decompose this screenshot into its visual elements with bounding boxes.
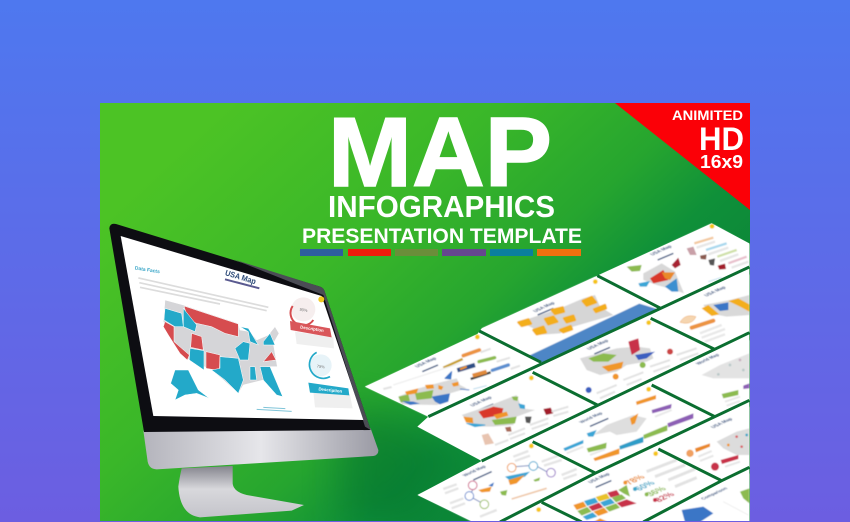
slide: USA pins map: USA Map	[710, 417, 735, 429]
heading: USA Map: USA Map	[224, 268, 257, 286]
subtitle: INFOGRAPHICS: INFOGRAPHICS	[328, 189, 555, 224]
monitor	[109, 224, 380, 520]
badge: ANIMITED: ANIMITED	[672, 107, 743, 123]
percent list: 36%	[643, 485, 669, 498]
slide: world dots map	[653, 340, 749, 412]
slide backing	[365, 223, 749, 522]
heading: Data Facts: Data Facts	[134, 265, 160, 275]
gauge: red 90%: 90%	[299, 307, 308, 313]
slide: USA pins map	[686, 406, 750, 472]
footer url	[257, 407, 292, 411]
body text lines	[138, 278, 268, 311]
USA map tiles	[573, 485, 637, 522]
gauge: blue 75%: 75%	[317, 363, 326, 369]
Alaska	[171, 370, 209, 400]
panel: green cover	[100, 97, 750, 522]
slide: USA chart map: USA Map	[703, 286, 728, 298]
slide: world network	[418, 443, 593, 522]
slide: USA percent map	[535, 320, 712, 404]
slide: USA chart map	[679, 274, 750, 342]
slide: world network: World Map	[461, 465, 488, 478]
slide: USA transport map: USA Map	[414, 357, 439, 369]
percent list	[622, 474, 675, 503]
slide: USA regional map	[418, 375, 568, 456]
USA map	[163, 300, 283, 400]
percent list: 78%	[622, 473, 648, 486]
slide: world tags: World Map	[578, 411, 605, 424]
colour bars	[300, 249, 581, 256]
slide collage	[340, 223, 749, 522]
slide: bottom centre	[536, 506, 542, 513]
title: MAP: MAP	[328, 97, 552, 207]
slide: USA percent map: USA Map	[586, 339, 611, 351]
slide: comparison map: Comparison	[700, 487, 730, 501]
percent list: 82%	[652, 491, 678, 503]
slide: Mexico map	[600, 222, 750, 294]
banner: red description	[290, 321, 334, 348]
badge: HD: HD	[699, 121, 744, 157]
monitor bezel	[109, 224, 371, 432]
gauge: blue 75%	[309, 352, 332, 378]
monitor stand	[178, 466, 304, 517]
gauge: red 90%	[291, 297, 315, 325]
title colour bars	[225, 279, 259, 288]
slide: world tags	[563, 386, 694, 462]
badge: 16x9: 16x9	[700, 152, 743, 172]
slide: USA regional map: USA Map	[469, 396, 494, 408]
yellow badge	[318, 296, 324, 302]
banner: blue description: Description	[318, 386, 343, 394]
slide: USA transport map	[365, 334, 539, 417]
slide: USA colourful percent list: USA Map	[587, 472, 612, 484]
percent list: 60%	[632, 479, 658, 492]
monitor shadow	[167, 453, 380, 520]
slide: Mexico map: USA Map	[649, 245, 674, 257]
slide: blue band map: USA Map	[532, 301, 557, 313]
slide: USA colourful percent list	[573, 450, 697, 521]
slide: comparison map	[681, 473, 750, 521]
gaps between slides	[428, 267, 749, 522]
slide: blue band map	[482, 277, 660, 364]
banner: blue description	[308, 383, 353, 408]
banner: red description: Description	[300, 324, 324, 333]
collage drop shadow	[332, 401, 450, 521]
subtitle: PRESENTATION TEMPLATE: PRESENTATION TEMPLATE	[302, 225, 582, 248]
monitor chin	[143, 428, 378, 469]
corner badge	[615, 103, 750, 210]
monitor screen	[121, 236, 363, 420]
slide: world dots map: World Map	[695, 353, 722, 366]
